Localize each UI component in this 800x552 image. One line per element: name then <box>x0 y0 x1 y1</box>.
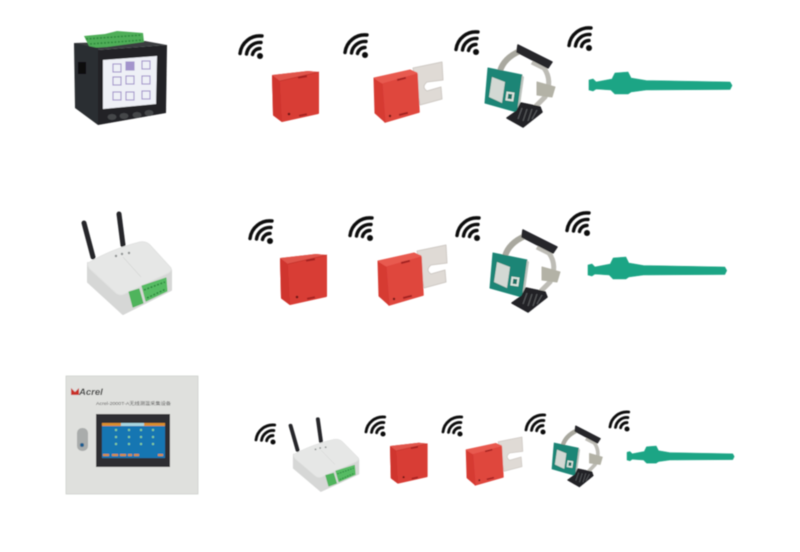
row 1 red sensor with fork terminal <box>374 62 443 122</box>
row 1 wifi icon 2 <box>345 35 368 58</box>
row 2 wifi icon 3 <box>457 218 480 241</box>
row 3 wifi icon 4 <box>526 415 546 435</box>
device: wireless gateway with antennas <box>84 214 171 314</box>
row 1 wifi icon 3 <box>456 32 479 55</box>
touch screen <box>96 414 170 467</box>
row 2 wifi icon 4 <box>567 213 590 236</box>
device: wall-mounted data collection cabinet <box>66 376 198 494</box>
row 3 red sensor box <box>390 443 428 484</box>
row 1 green cable-tie sensor <box>589 72 732 94</box>
row 3 wifi icon 1 <box>256 425 276 445</box>
logo: Acrel: Acrel <box>78 387 103 398</box>
row 3 wifi icon 3 <box>443 417 463 437</box>
row 2 red sensor box <box>280 254 327 305</box>
row 1 green clamp sensor <box>485 45 555 127</box>
row 3 wireless gateway <box>291 419 359 491</box>
row 2 red sensor with fork terminal <box>378 245 447 305</box>
row 3 wifi icon 5 <box>610 412 630 432</box>
row 3 wifi icon 2 <box>366 417 386 437</box>
device: touchscreen temperature display meter <box>74 31 167 125</box>
row 2 wifi icon 2 <box>350 218 373 241</box>
row 2 green clamp sensor <box>490 230 560 312</box>
row 1 wifi icon 4 <box>569 28 592 51</box>
row 3 green clamp sensor <box>552 426 602 487</box>
row 1 wifi icon 1 <box>240 36 263 59</box>
row 2 wifi icon 1 <box>250 221 273 244</box>
row 3 red sensor with fork terminal <box>466 437 523 485</box>
row 3 green cable-tie sensor <box>627 446 734 463</box>
cabinet model label: Acrel-2000T-A无线测温采集设备 <box>96 400 171 407</box>
row 2 green cable-tie sensor <box>588 257 727 279</box>
door lock <box>77 428 88 451</box>
row 1 red sensor box <box>272 71 319 122</box>
